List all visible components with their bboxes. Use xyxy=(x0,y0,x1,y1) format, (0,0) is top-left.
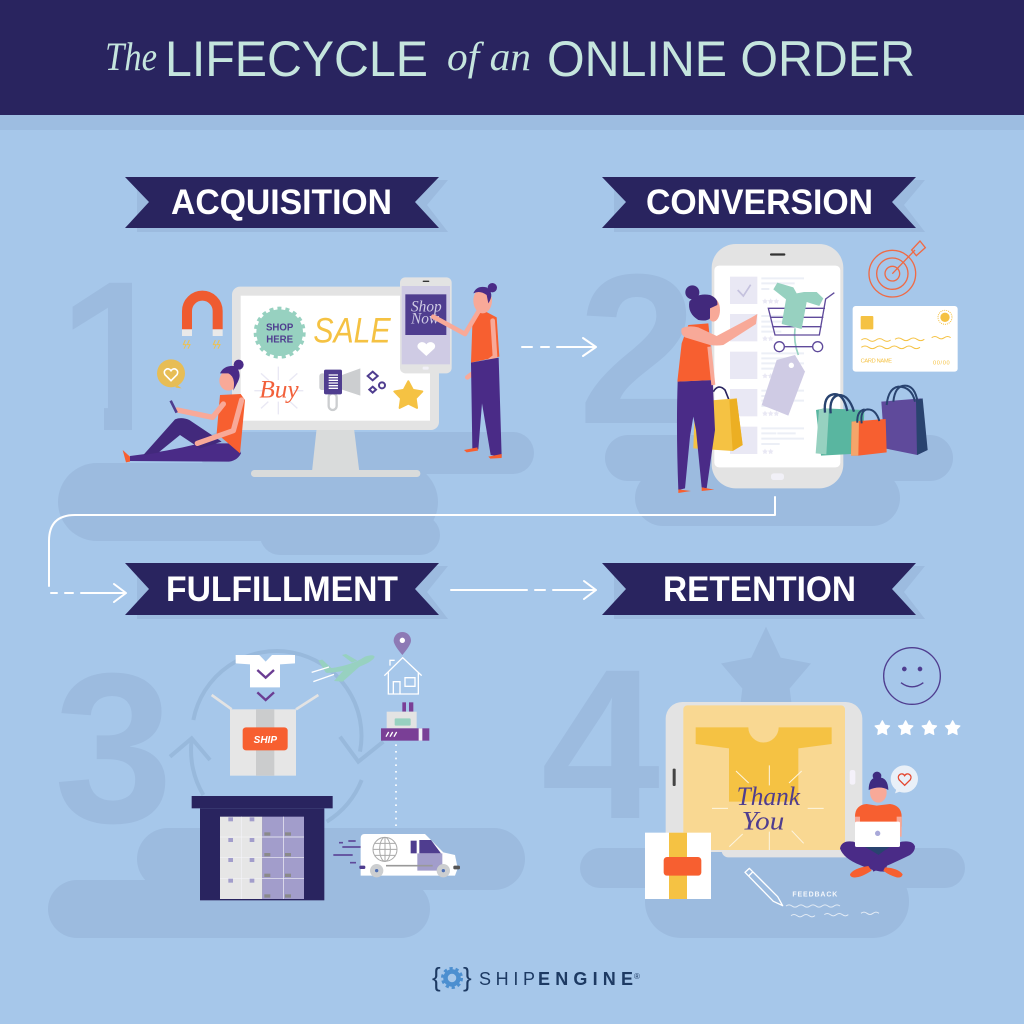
credit card xyxy=(853,306,958,372)
shipping box xyxy=(212,695,318,776)
big step numbers: 3 xyxy=(54,629,173,868)
title banner: ONLINE ORDER xyxy=(547,31,915,87)
thank you message xyxy=(712,765,824,850)
badge: shop here xyxy=(255,308,304,357)
ribbon: conversion: CONVERSION xyxy=(646,183,873,222)
delivery van xyxy=(333,834,460,877)
product list xyxy=(730,277,804,454)
cycle arrows xyxy=(170,651,383,822)
big phone xyxy=(712,244,843,488)
ribbon: retention: RETENTION xyxy=(663,570,856,609)
thank you message: You xyxy=(742,806,784,835)
feedback text: FEEDBACK xyxy=(792,891,837,898)
ribbon: retention xyxy=(602,563,925,619)
price tag xyxy=(762,328,805,416)
person: standing woman xyxy=(433,283,502,459)
icon: megaphone xyxy=(319,368,360,410)
arrow: fulfillment to retention xyxy=(451,581,596,599)
shopping cart xyxy=(768,293,834,352)
icon: location pin xyxy=(394,632,411,655)
logo: shipengine xyxy=(432,962,640,992)
panel: conversion illustration xyxy=(677,241,958,493)
person: sitting woman xyxy=(123,360,245,462)
panel: retention illustration xyxy=(645,627,960,917)
t-shirt xyxy=(696,727,832,802)
thank you message: Thank xyxy=(737,782,800,811)
shopping bags xyxy=(816,386,928,456)
icon: airplane xyxy=(312,654,375,682)
badge: shop here: SHOP xyxy=(266,323,294,334)
icon: star xyxy=(394,381,422,408)
big step numbers: 1 xyxy=(58,237,177,476)
t-shirt xyxy=(773,283,823,329)
ribbon: acquisition xyxy=(125,177,448,232)
logo: shipengine: ® xyxy=(634,972,640,981)
rating stars xyxy=(875,721,960,735)
tablet xyxy=(666,702,862,857)
ribbon: acquisition: ACQUISITION xyxy=(171,183,392,222)
ribbon: conversion xyxy=(602,177,925,232)
background star xyxy=(721,627,811,723)
text: buy with rays xyxy=(254,367,303,414)
icon: smiley xyxy=(884,648,940,704)
monitor xyxy=(232,287,439,477)
panel: fulfillment illustration xyxy=(170,632,460,900)
icon: heart speech bubble xyxy=(891,765,918,793)
ribbon: fulfillment xyxy=(125,563,448,619)
shipping box: SHIP xyxy=(254,735,277,746)
small phone: Shop xyxy=(411,299,442,316)
person: woman with laptop xyxy=(840,772,915,878)
gift box xyxy=(645,833,711,899)
logo: shipengine: SHIP xyxy=(479,969,535,989)
dotted route line xyxy=(393,744,398,827)
big step numbers: 2 xyxy=(578,230,697,469)
icon: magnet xyxy=(182,296,223,349)
big step numbers: 4 xyxy=(541,625,660,864)
credit card: CARD NAME xyxy=(861,359,892,365)
big step numbers xyxy=(59,274,686,824)
ribbon: fulfillment: FULFILLMENT xyxy=(166,570,398,609)
sparkles xyxy=(368,372,385,393)
text: buy with rays: Buy xyxy=(259,376,299,404)
logo: shipengine: ENGINE xyxy=(538,969,633,989)
feedback text xyxy=(786,891,879,917)
icon: pencil xyxy=(745,868,783,906)
person: woman shopping xyxy=(677,285,757,493)
panel: acquisition illustration xyxy=(123,277,502,477)
icon: heart bubble xyxy=(157,359,185,388)
logo: shipengine: } xyxy=(463,962,472,992)
badge: shop here: HERE xyxy=(266,334,294,345)
arrow: acquisition to conversion xyxy=(522,338,596,356)
small phone: Now xyxy=(410,310,440,327)
small phone xyxy=(400,277,452,373)
title banner xyxy=(0,0,1024,115)
warehouse xyxy=(192,796,333,900)
t-shirt xyxy=(236,655,295,700)
title banner: LIFECYCLE xyxy=(165,31,428,87)
title banner: The xyxy=(105,34,157,79)
credit card: 00/00 xyxy=(933,361,950,367)
text: sale: SALE xyxy=(313,312,391,351)
background clouds xyxy=(48,432,965,938)
title banner: of an xyxy=(447,34,531,79)
logo: shipengine: { xyxy=(432,962,441,992)
icon: target xyxy=(869,241,925,297)
icon: house xyxy=(384,658,422,694)
arrow: conversion to fulfillment xyxy=(49,497,775,602)
packages xyxy=(381,702,429,741)
